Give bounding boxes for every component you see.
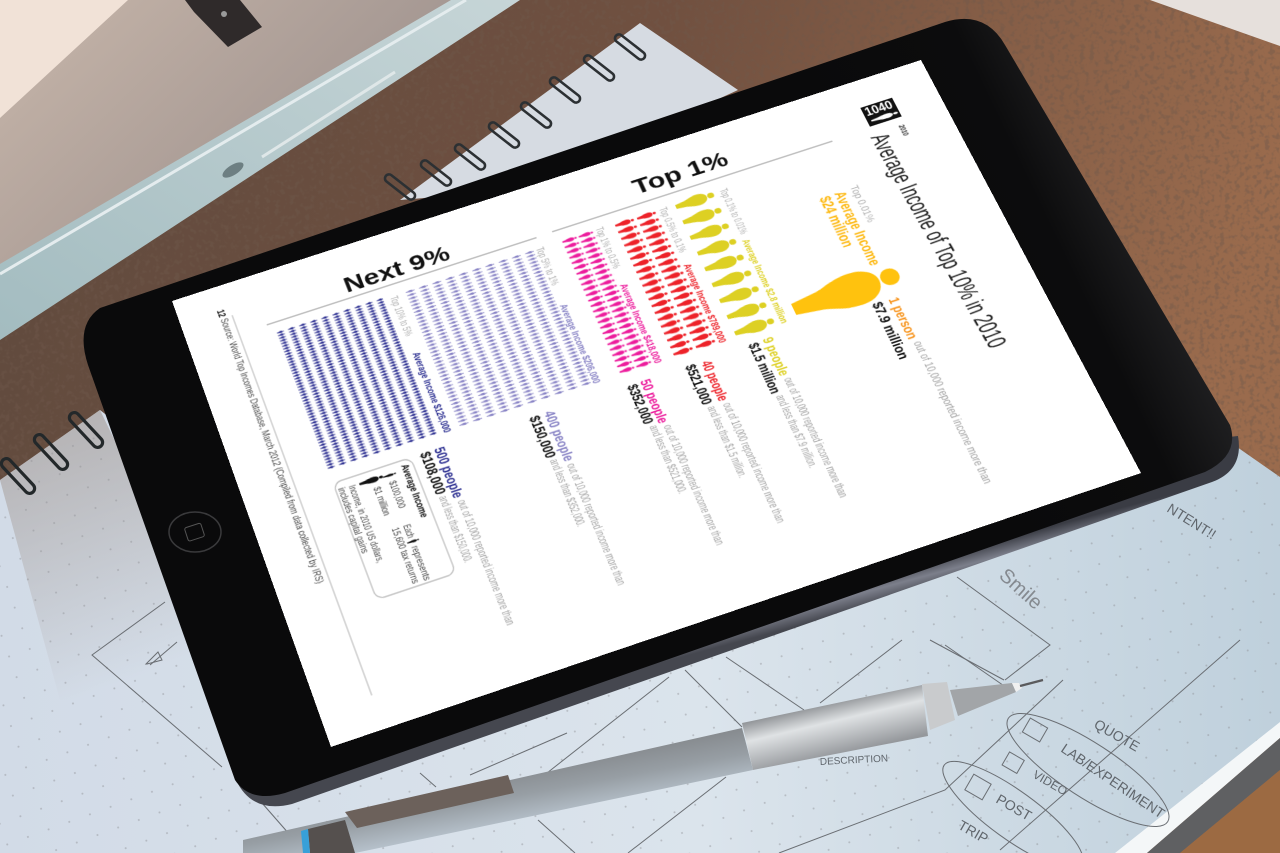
upper spiral binding	[383, 33, 647, 201]
icon: fifty people	[561, 229, 654, 375]
pencil collar	[922, 682, 955, 730]
description: and less than $352,000.	[525, 439, 557, 501]
description: out of 10,000 reported income more than	[541, 443, 588, 550]
threshold: $150,000	[509, 401, 537, 442]
notebook rim bottom right	[1115, 722, 1280, 853]
people count: 400 people	[524, 396, 555, 445]
range label: Top 1% to 0.5%	[593, 226, 618, 268]
title: Average Income of Top 10% in 2010	[874, 132, 981, 341]
range label: Top 0.1% to 0.01%	[720, 188, 747, 235]
description: out of 10,000 reported income more than	[756, 364, 805, 473]
lower spiral binding	[0, 411, 105, 495]
pencil barrel	[243, 728, 753, 853]
range label: Top 5% to 1%	[533, 246, 556, 285]
pencil tip	[1020, 680, 1043, 686]
tablet steel edge	[236, 436, 1239, 806]
handwritten sketch notes: LAB/EXPERIMENT	[1058, 740, 1168, 822]
description: out of 10,000 reported income more than	[636, 408, 684, 515]
legend box	[333, 458, 456, 600]
pencil dark section	[308, 820, 355, 853]
description: and less than $150,000.	[417, 473, 449, 533]
legend $100,000: $100,000	[372, 461, 390, 487]
tier: top 0.5% to 0.1%	[613, 205, 810, 532]
tier: top 10% to 5%	[276, 293, 528, 662]
heading: top 1%: Top 1%	[635, 149, 739, 200]
icon: tiny person	[407, 538, 420, 544]
logo: 1040 form	[860, 97, 902, 127]
description: out of 10,000 reported income more than	[695, 387, 743, 495]
legend note line 1: Income, in 2010 US dollars,	[333, 465, 366, 534]
threshold: $352,000	[606, 371, 634, 411]
handwritten sketch notes: Smile	[995, 564, 1047, 614]
threshold: $521,000	[664, 353, 691, 393]
tier: top 5% to 1%	[405, 246, 683, 614]
handwritten sketch notes: VIDEO	[1030, 767, 1070, 798]
pencil sketches on paper	[92, 577, 1240, 853]
range label: Top 0.01%	[849, 185, 872, 223]
icon: forty people	[613, 209, 719, 358]
people count: 9 people	[741, 327, 769, 366]
icon: five hundred people	[276, 297, 437, 470]
icon: small person	[382, 472, 397, 479]
legend title: Average Income	[383, 446, 410, 496]
footer rule	[232, 315, 372, 695]
white object top right	[1150, 0, 1280, 46]
heading: next 9%: Next 9%	[340, 242, 453, 296]
average income: Average Income $126,000	[402, 345, 438, 420]
description: out of 10,000 reported income more than	[885, 330, 940, 459]
legend represents: represents	[388, 517, 409, 549]
pencil clip	[345, 775, 514, 828]
average income heading: Average Income	[831, 190, 872, 264]
handwritten sketch notes: DESCRIPTION	[820, 753, 888, 768]
handwritten sketch notes: NTENT!!	[1164, 500, 1219, 542]
mechanical pencil	[243, 680, 1043, 853]
handwritten sketch notes: TRIP	[956, 817, 991, 847]
description: out of 10,000 reported income more than	[434, 476, 483, 585]
average income value: $24 million	[816, 195, 849, 247]
footer source: 12 Source: World Top Incomes Database, March 2012 (Compiled from data collected by IRS)	[213, 307, 308, 553]
icon: four hundred people	[405, 249, 591, 427]
handwritten sketch notes: QUOTE	[1092, 716, 1143, 754]
tablet screen: infographic page	[172, 60, 1141, 747]
average income: Average Income $2.8 million	[735, 237, 773, 318]
threshold: $108,000	[402, 434, 430, 475]
legend $1 million: $1 million	[356, 466, 375, 494]
people count: 40 people	[680, 349, 707, 389]
pencil cone	[950, 683, 1016, 716]
threshold: $1.5 million	[727, 333, 758, 382]
logo year: 2010	[908, 125, 921, 138]
range label: Top 0.5% to 0.1%	[658, 207, 684, 253]
tier: top 0.1% to 0.01%	[674, 185, 871, 506]
threshold: $7.9 million	[851, 294, 884, 350]
description: and less than $7.9 million.	[746, 380, 781, 447]
laptop	[0, 0, 520, 340]
description: and less than $521,000.	[623, 408, 655, 471]
people count: 500 people	[416, 430, 446, 478]
handwritten sketch notes: POST	[994, 791, 1035, 824]
pencil blue ring	[301, 829, 310, 853]
icon: large person	[786, 259, 907, 325]
home button	[169, 512, 221, 552]
tier: top 0.01%	[750, 184, 1006, 515]
tier: top 1% to 0.5%	[559, 226, 743, 553]
heading rule: next 9%	[267, 238, 537, 325]
legend each: Each	[382, 499, 396, 513]
handwritten sketch notes	[820, 500, 1219, 847]
average income: Average Income $418,000	[611, 280, 647, 356]
pencil knurled grip	[742, 685, 928, 770]
upper notebook page	[400, 23, 738, 200]
icon: nine people	[674, 190, 776, 339]
legend note line 2: includes capital gains	[323, 467, 352, 527]
description: and less than $1.5 million.	[680, 391, 714, 457]
heading rule: top 1%	[552, 141, 832, 232]
people count: 1 person	[868, 290, 896, 332]
average income: Average Income $206,000	[550, 299, 586, 375]
people count: 50 people	[619, 367, 648, 410]
range label: Top 10% to 5%	[385, 293, 409, 333]
average income: Average Income $789,000	[675, 261, 711, 337]
icon: medium person	[358, 474, 384, 487]
lower notebook page	[0, 410, 1280, 853]
logo: 1040 form: 1040	[878, 100, 910, 121]
legend tax returns: 15,600 tax returns	[371, 501, 397, 551]
